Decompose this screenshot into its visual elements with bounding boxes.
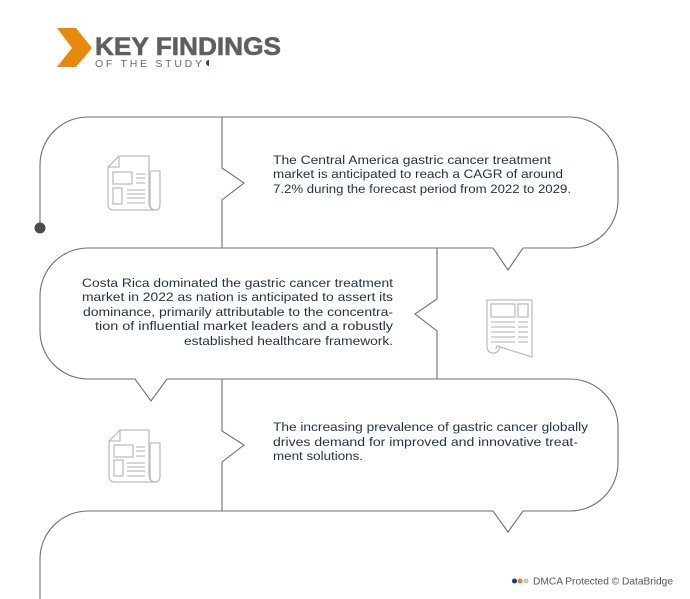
text: panel 2 bbox=[82, 276, 394, 348]
heading: key findings: KEY FINDINGS bbox=[95, 33, 281, 61]
text: panel 2: tion of influential market leaders and a robustly bbox=[95, 319, 394, 333]
icon: newspaper 1 bbox=[108, 156, 160, 210]
text: panel 2: established healthcare framework. bbox=[184, 334, 393, 348]
text: panel 3 bbox=[273, 420, 589, 463]
text: panel 2: market in 2022 as nation is anticipated to assert its bbox=[82, 290, 393, 304]
text: panel 2: Costa Rica dominated the gastric cancer treatment bbox=[82, 276, 394, 290]
text: panel 2: dominance, primarily attributable to the concentra- bbox=[83, 305, 393, 319]
watermark text: DMCA Protected © DataBridge bbox=[533, 576, 673, 588]
header logo chevron bbox=[57, 28, 92, 67]
subheading: of the study: OF THE STUDY bbox=[95, 58, 202, 70]
divider with notch: panel 1 bbox=[222, 117, 244, 248]
text: panel 3: ment solutions. bbox=[273, 449, 363, 463]
watermark dots bbox=[512, 578, 528, 584]
icon: newspaper 2 bbox=[487, 300, 532, 357]
text: panel 1 bbox=[273, 153, 571, 196]
divider with notch: panel 3 bbox=[222, 379, 244, 511]
timeline start dot bbox=[34, 222, 46, 234]
timeline outline bbox=[40, 117, 618, 599]
text: panel 1: 7.2% during the forecast period from 2022 to 2029. bbox=[273, 182, 571, 196]
text: panel 3: drives demand for improved and innovative treat- bbox=[273, 435, 578, 449]
text: panel 1: market is anticipated to reach a CAGR of around bbox=[273, 167, 563, 181]
divider with notch: panel 2 bbox=[415, 248, 437, 379]
text: panel 3: The increasing prevalence of gastric cancer globally bbox=[273, 420, 589, 434]
icon: newspaper 3 bbox=[109, 430, 160, 482]
text: panel 1: The Central America gastric cancer treatment bbox=[273, 153, 552, 167]
accent mark bbox=[206, 60, 209, 66]
